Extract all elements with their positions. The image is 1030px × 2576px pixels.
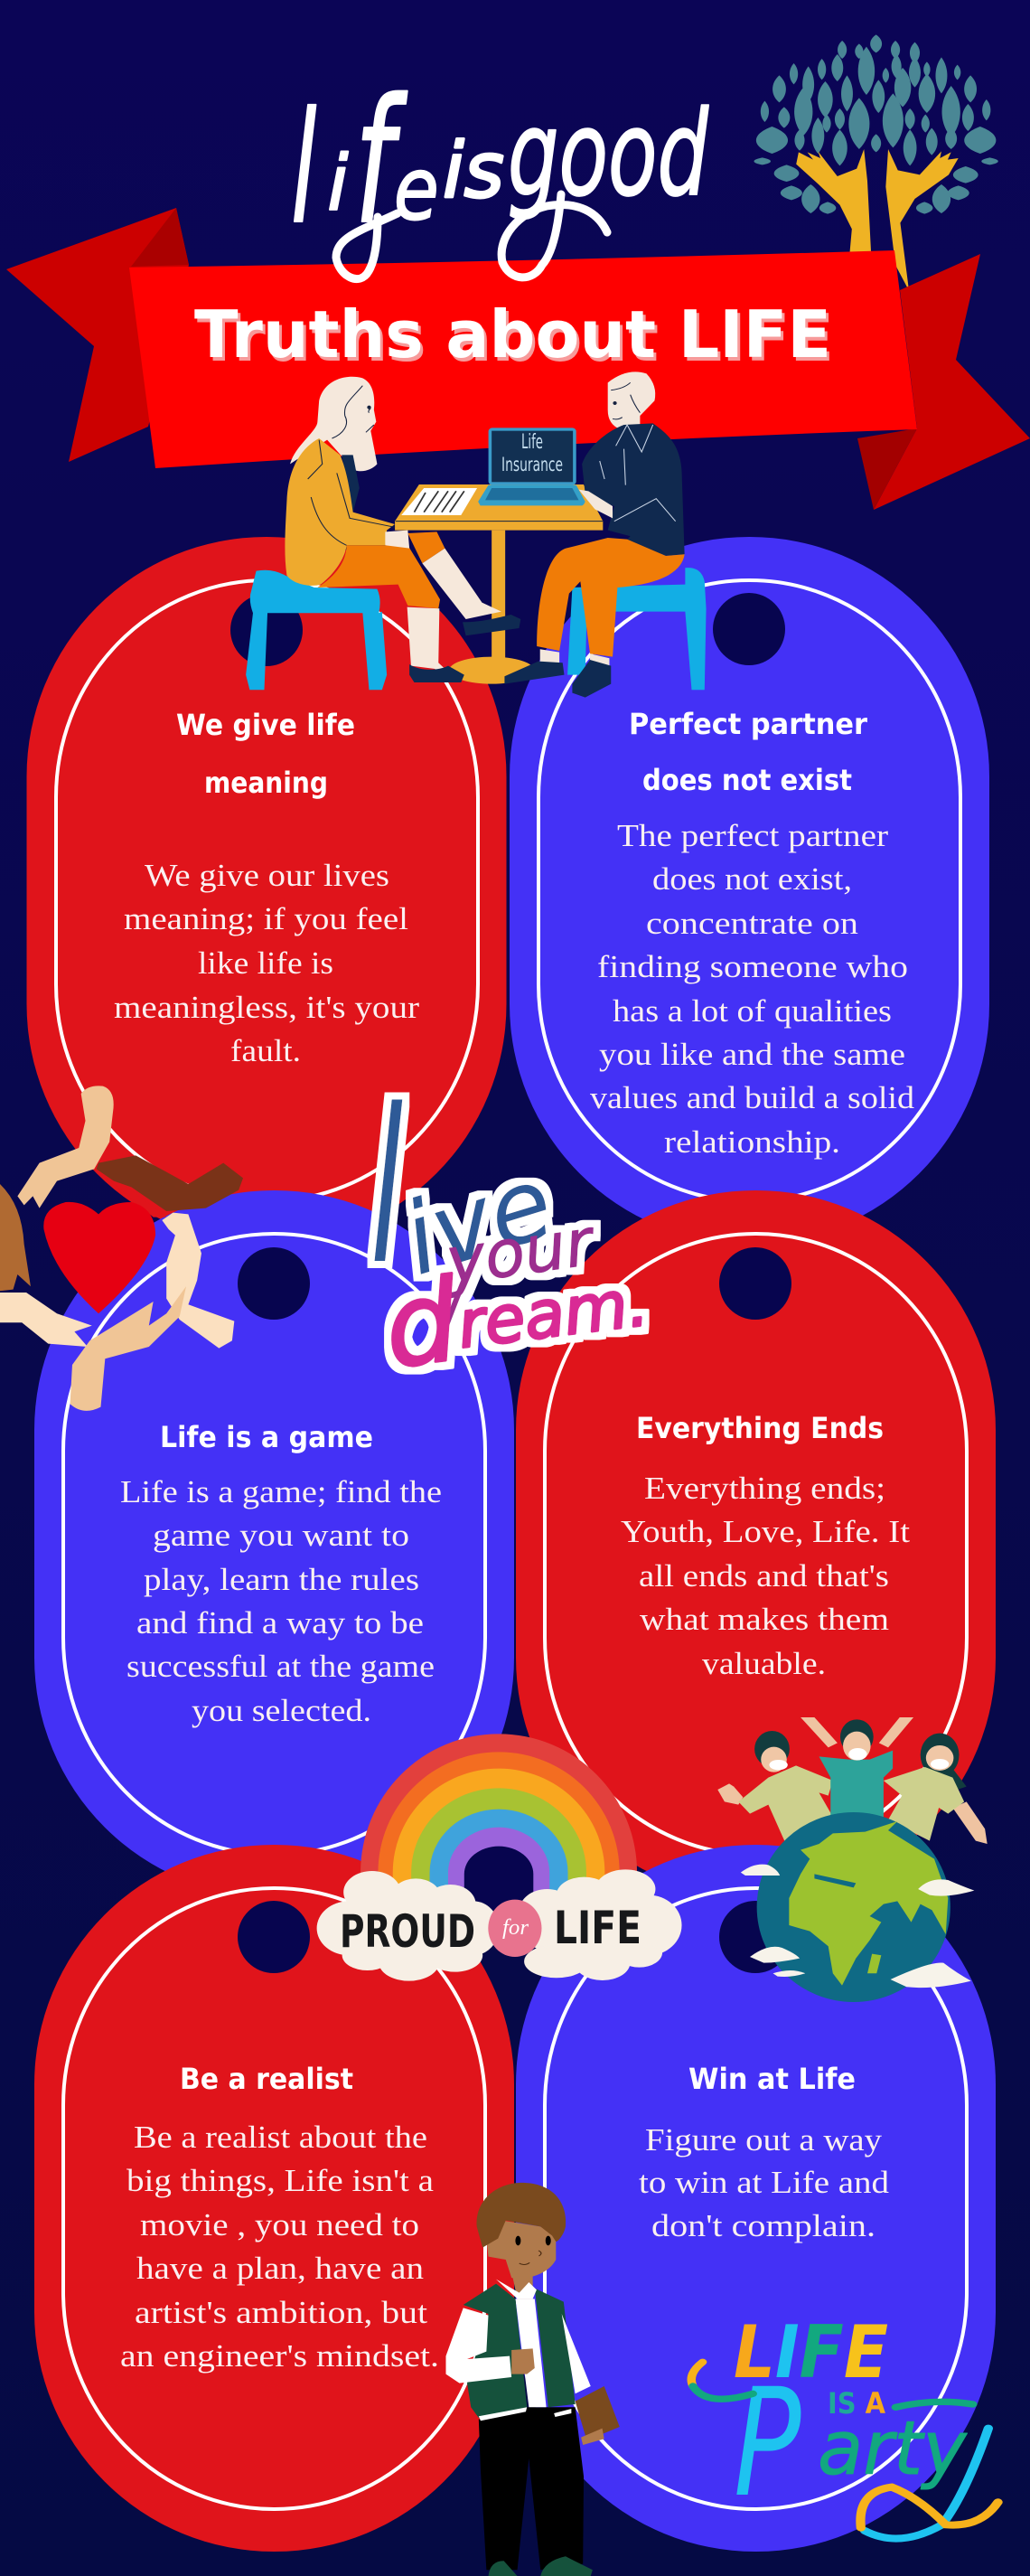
woman bbox=[285, 377, 520, 682]
heading: meaning bbox=[204, 766, 328, 800]
body text: has a lot of qualities bbox=[613, 993, 892, 1029]
panel: We give life meaning bbox=[27, 537, 506, 1244]
body text: does not exist, bbox=[652, 861, 852, 897]
body text bbox=[639, 2122, 890, 2243]
heading: does not exist bbox=[642, 763, 852, 797]
body text bbox=[120, 2120, 439, 2374]
illustration: people on the globe bbox=[717, 1717, 988, 2002]
right stool bbox=[567, 568, 707, 690]
sticker: live your dream bbox=[370, 1064, 655, 1394]
body text: Everything ends; bbox=[644, 1471, 885, 1506]
heading: Life is a game bbox=[160, 1420, 373, 1454]
laptop screen text: Insurance bbox=[501, 454, 563, 475]
sticker: Life is a Party: arty bbox=[818, 2406, 968, 2492]
left stool bbox=[246, 570, 387, 690]
title logo: life is good: good bbox=[508, 85, 709, 222]
panel: Perfect partner does not exist bbox=[510, 537, 989, 1244]
body text bbox=[590, 818, 915, 1160]
title logo: life is good bbox=[291, 61, 709, 279]
sticker: live your dream: ive bbox=[390, 1144, 566, 1298]
body text: play, learn the rules bbox=[144, 1562, 419, 1597]
body text: finding someone who bbox=[597, 949, 908, 984]
illustration: circle of hands with heart bbox=[0, 1086, 243, 1411]
banner: right tail bbox=[857, 254, 1030, 510]
title logo: life is good: f bbox=[354, 61, 407, 262]
badge text: PROUD for LIFE bbox=[340, 1902, 641, 1958]
body text: you selected. bbox=[192, 1693, 371, 1728]
clouds bbox=[741, 1865, 974, 1988]
title logo: life is good: is bbox=[443, 127, 504, 216]
right friend bbox=[884, 1734, 988, 1844]
body text bbox=[621, 1471, 910, 1681]
sticker: Life is a Party bbox=[691, 2310, 998, 2539]
heading: Everything Ends bbox=[636, 1411, 884, 1445]
heading: We give life bbox=[176, 708, 355, 742]
title logo: life is good: l bbox=[291, 80, 316, 259]
badge text: PROUD for LIFE: PROUD bbox=[340, 1905, 475, 1958]
sticker: live your dream: your bbox=[440, 1203, 601, 1300]
body text: The perfect partner bbox=[617, 818, 888, 853]
panel: Win at Life bbox=[516, 1845, 996, 2552]
illustration: boy with clipboard bbox=[446, 2183, 620, 2576]
body text: don't complain. bbox=[651, 2208, 876, 2243]
sticker: live your dream: l bbox=[370, 1064, 403, 1312]
heading bbox=[176, 708, 355, 800]
paper document bbox=[401, 488, 477, 515]
heading: Win at Life bbox=[688, 2062, 856, 2096]
table bbox=[395, 484, 603, 684]
left friend bbox=[717, 1731, 833, 1841]
laptop with Life Insurance screen bbox=[478, 428, 585, 505]
body text: Youth, Love, Life. It bbox=[621, 1514, 910, 1549]
icon: tree with hands bbox=[754, 34, 998, 291]
body text bbox=[120, 1474, 442, 1728]
sticker: live your dream: ream. bbox=[454, 1264, 652, 1363]
body text: meaning; if you feel bbox=[124, 901, 408, 936]
body text: Life is a game; find the bbox=[120, 1474, 442, 1509]
panel: Be a realist bbox=[34, 1845, 514, 2552]
body text: you like and the same bbox=[599, 1037, 905, 1072]
body text: all ends and that's bbox=[639, 1558, 889, 1594]
sticker: live your dream: d bbox=[378, 1255, 465, 1394]
body text: what makes them bbox=[640, 1602, 889, 1637]
sticker: Life is a Party: P bbox=[734, 2357, 801, 2531]
body text: values and build a solid bbox=[590, 1080, 915, 1115]
sticker: Life is a Party: LIFE bbox=[734, 2310, 888, 2394]
body text: We give our lives bbox=[145, 858, 389, 893]
body text: artist's ambition, but bbox=[135, 2295, 427, 2330]
body text: game you want to bbox=[153, 1518, 409, 1553]
panel: Everything Ends bbox=[516, 1190, 996, 1897]
body text: relationship. bbox=[664, 1124, 840, 1160]
banner: main ribbon bbox=[129, 250, 917, 468]
heading: Perfect partner bbox=[629, 707, 867, 741]
body text: and find a way to be bbox=[136, 1605, 424, 1641]
body text: Figure out a way bbox=[645, 2122, 883, 2158]
body text: an engineer's mindset. bbox=[120, 2338, 439, 2374]
badge text: PROUD for LIFE: for bbox=[502, 1916, 529, 1940]
body text: successful at the game bbox=[126, 1649, 435, 1684]
body text: concentrate on bbox=[646, 906, 858, 941]
body text: big things, Life isn't a bbox=[126, 2163, 435, 2198]
title logo: life is good: e bbox=[394, 139, 439, 240]
body text bbox=[114, 858, 419, 1068]
title: Truths about LIFE: Truths about LIFE bbox=[194, 296, 831, 372]
globe bbox=[757, 1812, 950, 2002]
laptop screen text: Life bbox=[521, 431, 543, 454]
banner: left tail bbox=[6, 208, 189, 462]
body text: have a plan, have an bbox=[136, 2251, 424, 2286]
body text: valuable. bbox=[702, 1646, 826, 1681]
body text: Be a realist about the bbox=[134, 2120, 427, 2155]
sticker: Life is a Party: IS A bbox=[828, 2386, 885, 2421]
heading bbox=[629, 707, 867, 797]
badge text: PROUD for LIFE: LIFE bbox=[554, 1902, 641, 1954]
body text: to win at Life and bbox=[639, 2165, 890, 2200]
illustration: rainbow with clouds bbox=[317, 1734, 682, 1981]
body text: meaningless, it's your bbox=[114, 990, 419, 1025]
man bbox=[504, 371, 685, 698]
heading: Be a realist bbox=[180, 2062, 353, 2096]
panel: Life is a game bbox=[34, 1190, 514, 1897]
body text: like life is bbox=[198, 945, 333, 981]
illustration: couple at table with laptop bbox=[246, 371, 707, 698]
body text: fault. bbox=[230, 1033, 301, 1068]
centre friend bbox=[801, 1717, 913, 1817]
title logo: life is good: i bbox=[327, 139, 349, 229]
body text: movie , you need to bbox=[140, 2207, 419, 2242]
